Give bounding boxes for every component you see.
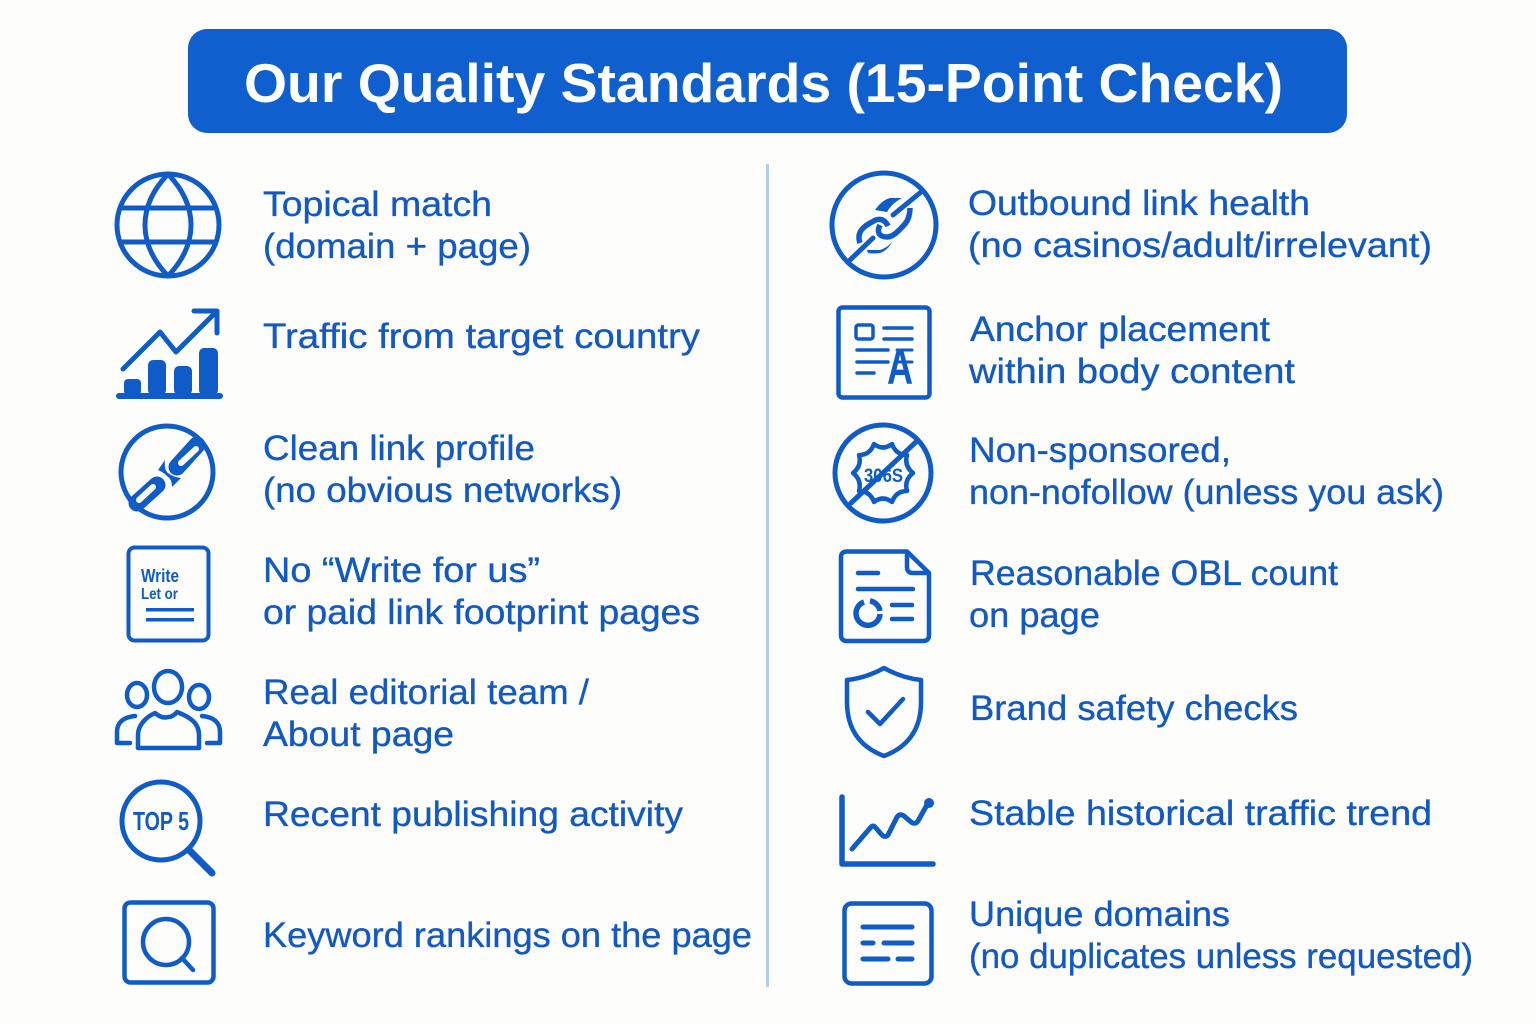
item: publishing activity <box>122 782 684 873</box>
panel: left column checks <box>116 174 752 982</box>
text: keyword rankings: Keyword rankings on the page <box>263 916 752 955</box>
text: brand safety: Brand safety checks <box>970 689 1298 728</box>
title banner <box>188 29 1347 133</box>
item: topical match <box>117 174 531 276</box>
icon: document with letter A <box>838 308 930 398</box>
text: editorial team: About page <box>263 715 454 754</box>
icon: list box <box>844 904 932 984</box>
item: no write for us <box>128 548 700 640</box>
icon: write for us page: Write <box>141 566 179 586</box>
text: outbound link health <box>968 184 1432 265</box>
text: anchor placement: Anchor placement <box>970 310 1270 349</box>
item: stable traffic trend <box>842 794 1432 864</box>
icon: rising bar chart <box>116 311 223 399</box>
text: clean link profile <box>263 429 622 510</box>
icon: team of people <box>117 671 220 748</box>
item: clean link profile <box>121 426 622 518</box>
icon: top 5 magnifier: TOP 5 <box>133 806 189 836</box>
icon: search box <box>124 902 214 982</box>
icon: top 5 magnifier <box>122 782 212 873</box>
text: write for us <box>263 551 700 632</box>
text: traffic: Traffic from target country <box>263 317 701 356</box>
text: editorial team <box>263 673 589 754</box>
icon: document with letter A: A <box>887 339 913 395</box>
text: traffic trend: Stable historical traffic trend <box>969 794 1432 833</box>
icon: globe <box>117 174 219 276</box>
item: anchor placement <box>838 308 1295 398</box>
item: unique domains <box>844 895 1473 984</box>
text: topical match: Topical match <box>263 185 492 224</box>
text: unique domains <box>969 895 1473 976</box>
text: obl count: Reasonable OBL count <box>970 554 1338 593</box>
item: reasonable obl count <box>841 552 1338 641</box>
text: topical match <box>263 185 531 266</box>
icon: document with chart <box>841 552 929 641</box>
text: anchor placement <box>968 310 1295 391</box>
text: topical match: (domain + page) <box>263 227 531 266</box>
text: non-sponsored: non-nofollow (unless you ask) <box>969 473 1444 512</box>
text: clean link profile: (no obvious networks) <box>263 471 622 510</box>
item: non-sponsored <box>835 425 1444 521</box>
text: editorial team: Real editorial team / <box>263 673 589 712</box>
icon: shield with check <box>847 668 921 756</box>
icon: crossed badge <box>835 425 931 521</box>
icon: broken link in circle <box>121 426 213 518</box>
text: unique domains: (no duplicates unless requested) <box>969 937 1473 976</box>
text: write for us: No “Write for us” <box>263 551 540 590</box>
item: brand safety <box>847 668 1298 756</box>
title banner: Our Quality Standards (15-Point Check) <box>244 52 1283 114</box>
item: traffic from target country <box>116 311 701 399</box>
text: outbound link health: (no casinos/adult/irrelevant) <box>968 226 1432 265</box>
item: outbound link health <box>832 173 1432 277</box>
text: unique domains: Unique domains <box>969 895 1230 934</box>
item: editorial team <box>117 671 589 754</box>
text: write for us: or paid link footprint pages <box>263 593 700 632</box>
icon: write for us page <box>128 548 208 640</box>
text: clean link profile: Clean link profile <box>263 429 535 468</box>
item: keyword rankings <box>124 902 752 982</box>
icon: crossed chain link <box>832 173 936 277</box>
text: anchor placement: within body content <box>968 352 1295 391</box>
panel: right column checks <box>832 173 1473 984</box>
text: obl count: on page <box>969 596 1100 635</box>
icon: write for us page: Let or <box>141 586 178 603</box>
text: non-sponsored: Non-sponsored, <box>969 431 1231 470</box>
text: obl count <box>969 554 1338 635</box>
text: publishing: Recent publishing activity <box>263 795 684 834</box>
text: outbound link health: Outbound link health <box>968 184 1310 223</box>
icon: crossed badge: 306S <box>864 466 903 487</box>
icon: line chart <box>842 797 934 864</box>
text: non-sponsored <box>969 431 1444 512</box>
